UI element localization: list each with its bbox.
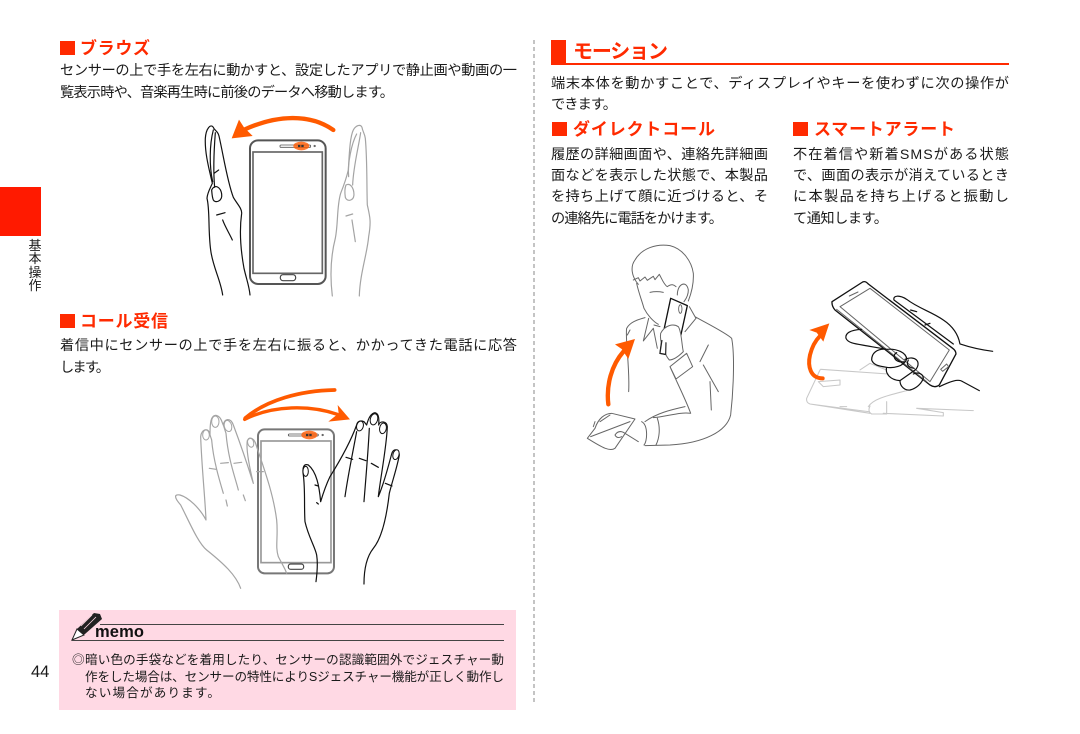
text: smart alert description: 不在着信や新着SMSがある状態 bbox=[793, 146, 1009, 163]
arrow: swipe left bbox=[232, 118, 333, 138]
text: call receive description: 着信中にセンサーの上で手を左右に振ると、かかってきた電話に応答 bbox=[60, 337, 517, 354]
illustration: hand lifting phone bbox=[807, 282, 993, 416]
heading: smart alert: スマートアラート bbox=[814, 120, 955, 139]
text: smart alert description bbox=[793, 146, 1009, 227]
icon: left hand bbox=[205, 126, 250, 295]
text: smart alert description: て通知します。 bbox=[793, 210, 888, 227]
section tab: 本 bbox=[28, 251, 42, 266]
text: call receive description: します。 bbox=[60, 360, 110, 376]
callout: memo bbox=[59, 610, 516, 710]
text: direct call description: 面などを表示した状態で、本製品 bbox=[551, 168, 768, 184]
text: direct call description: の連絡先に電話をかけます。 bbox=[551, 211, 723, 227]
text: smart alert description: に本製品を持ち上げると振動し bbox=[793, 189, 1009, 205]
icon: phone at ear bbox=[660, 298, 687, 360]
icon: right hand bbox=[303, 413, 400, 584]
text: memo note bbox=[72, 652, 504, 700]
icon: left hand faded bbox=[176, 415, 287, 588]
text: memo note: ない場合があります。 bbox=[85, 686, 220, 700]
icon: pencil bbox=[72, 613, 102, 640]
text: memo note: 作をした場合は、センサーの特性によりSジェスチャー機能が正しく動作し bbox=[85, 670, 504, 684]
text: motion description: 端末本体を動かすことで、ディスプレイやキーを使わずに次の操作が bbox=[551, 75, 1009, 92]
illustration: hand swipe over phone bbox=[205, 118, 370, 296]
text: memo note: 暗い色の手袋などを着用したり、センサーの認識範囲外でジェスチャー動 bbox=[85, 652, 504, 667]
text: memo label: memo bbox=[95, 623, 144, 641]
icon: phone bbox=[250, 140, 326, 284]
icon: man bbox=[626, 245, 734, 446]
text: browse description: 覧表示時や、音楽再生時に前後のデータへ移動します。 bbox=[60, 84, 394, 101]
section tab bbox=[0, 187, 42, 293]
icon: raised phone bbox=[832, 282, 956, 387]
icon: hand holding phone bbox=[846, 296, 993, 391]
heading: browse: ブラウズ bbox=[80, 38, 150, 58]
heading: call receive: コール受信 bbox=[80, 312, 168, 331]
section tab: 作 bbox=[28, 278, 42, 293]
icon: phone in hand bbox=[587, 413, 638, 450]
page number: 44 bbox=[31, 663, 49, 681]
heading: motion: モーション bbox=[573, 41, 668, 63]
text: motion description bbox=[551, 75, 1009, 113]
text: memo note: ◎ bbox=[72, 653, 85, 667]
section tab: 基 bbox=[28, 238, 42, 253]
section tab: 操 bbox=[28, 265, 42, 280]
illustration: hand wave over phone bbox=[176, 390, 400, 588]
divider bbox=[533, 40, 535, 705]
text: motion description: できます。 bbox=[551, 97, 617, 113]
text: direct call description: 履歴の詳細画面や、連絡先詳細画 bbox=[551, 147, 768, 163]
text: browse description bbox=[60, 62, 517, 101]
icon: phone bbox=[258, 429, 334, 573]
text: direct call description: を持ち上げて顔に近づけると、そ bbox=[551, 189, 768, 205]
illustration: man lifting phone to ear bbox=[587, 245, 734, 450]
text: call receive description bbox=[60, 337, 517, 376]
arrow: lift up bbox=[809, 323, 829, 378]
text: smart alert description: で、画面の表示が消えているとき bbox=[793, 168, 1009, 184]
heading: motion bbox=[551, 40, 1009, 65]
arrow: lift up bbox=[608, 339, 635, 404]
text: browse description: センサーの上で手を左右に動かすと、設定したアプリで静止画や動画の一 bbox=[60, 62, 517, 79]
icon: right hand faded bbox=[331, 125, 370, 296]
icon: faded lower phone and hand bbox=[807, 363, 973, 416]
arrow: swipe right bbox=[245, 390, 350, 422]
text: direct call description bbox=[551, 147, 768, 227]
heading: direct call: ダイレクトコール bbox=[573, 119, 715, 139]
